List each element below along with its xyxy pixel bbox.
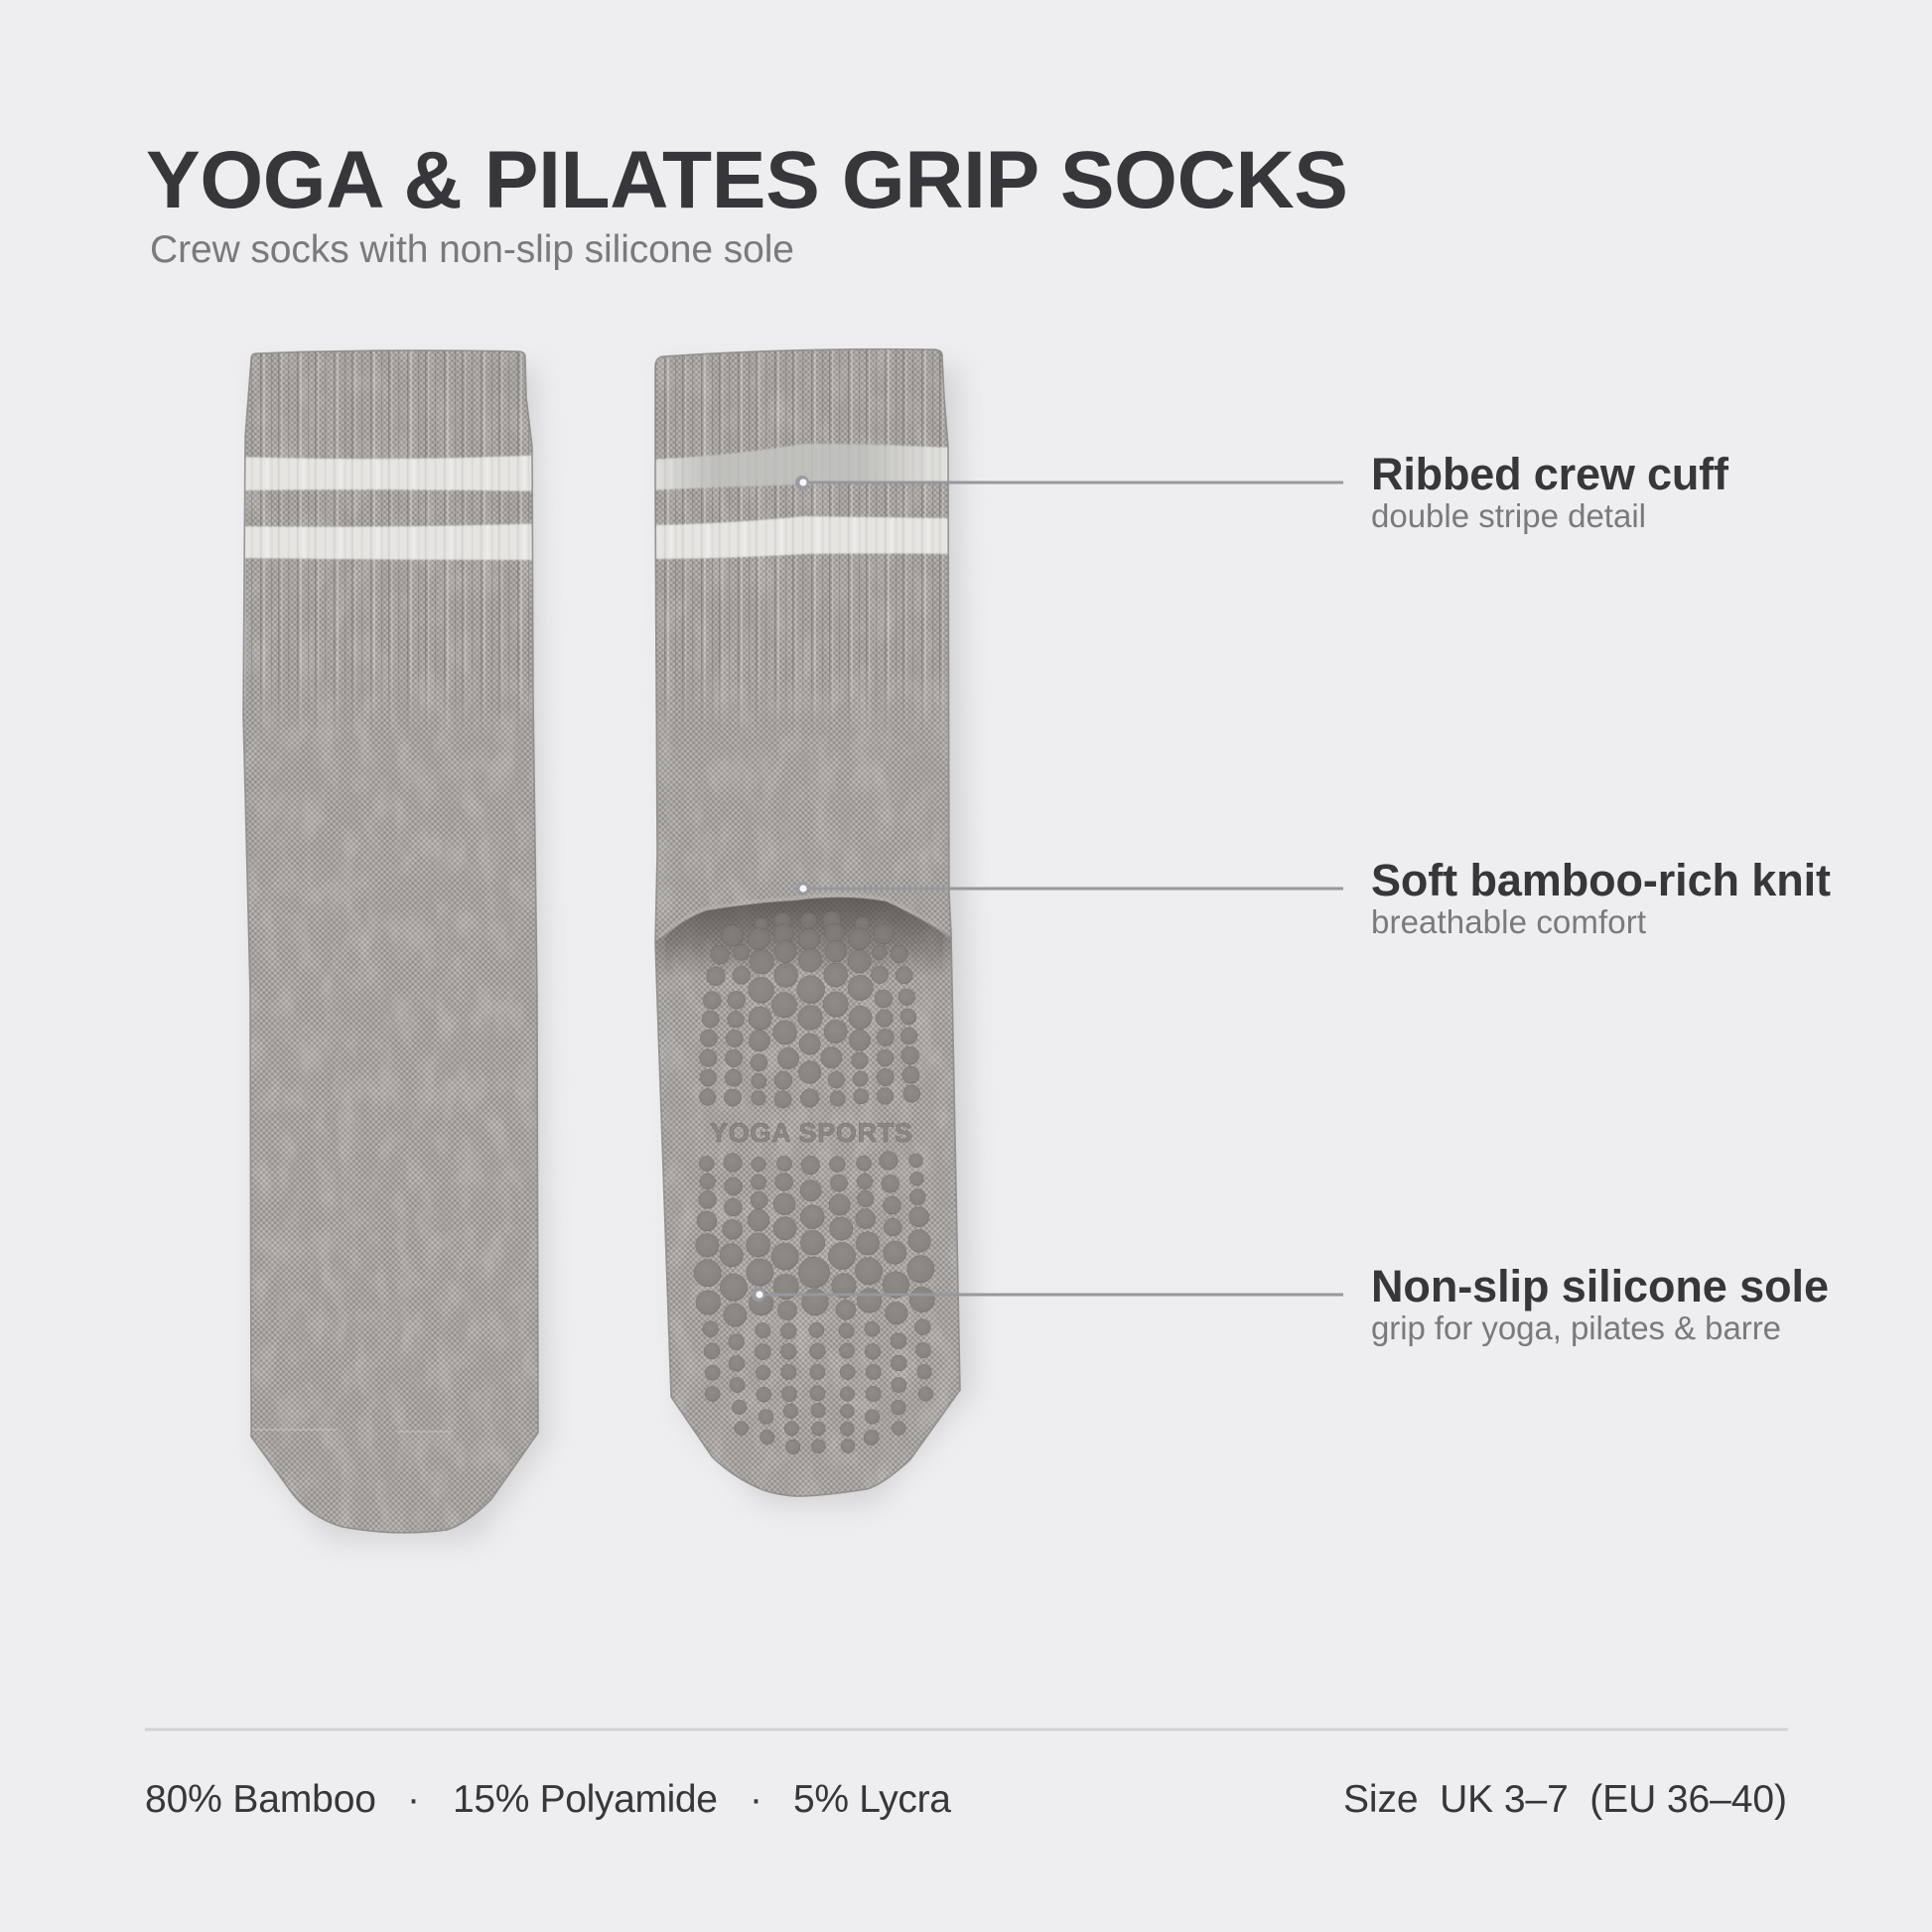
callout: ribbed crew cuff	[795, 449, 1729, 534]
callout: soft bamboo-rich knit	[795, 855, 1831, 940]
heel shade over grip dots	[665, 897, 943, 978]
footer: materials: ·	[750, 1778, 762, 1821]
label	[1371, 449, 1729, 534]
label: double stripe detail	[1371, 497, 1646, 534]
label: Non-slip silicone sole	[1371, 1261, 1829, 1311]
sock shadow	[260, 367, 548, 1539]
cuff stripes	[645, 444, 953, 559]
label	[1371, 1261, 1829, 1346]
leader line	[802, 481, 1343, 484]
callout: non-slip silicone sole	[752, 1261, 1829, 1346]
sock body	[238, 343, 546, 1544]
left sock: front view	[238, 343, 548, 1544]
marker dot	[752, 1288, 765, 1302]
sock shadow	[667, 367, 973, 1504]
footer: materials: 15% Polyamide	[453, 1778, 718, 1821]
label: Soft bamboo-rich knit	[1371, 855, 1831, 905]
leader line	[802, 888, 1343, 890]
label	[1371, 855, 1831, 940]
label: Ribbed crew cuff	[1371, 449, 1729, 499]
footer: materials: 80% Bamboo	[145, 1778, 376, 1821]
footer: materials: 5% Lycra	[793, 1778, 951, 1821]
footer: size: Size UK 3–7 (EU 36–40)	[1343, 1778, 1787, 1821]
title: YOGA & PILATES GRIP SOCKS	[146, 135, 1348, 225]
footer: materials	[145, 1778, 951, 1821]
silicone grip dots: forefoot and toe	[694, 1189, 934, 1454]
silicone grip dots: heel	[699, 911, 923, 1201]
cuff stripes	[238, 455, 546, 560]
heel fold	[655, 897, 951, 969]
marker dot	[795, 476, 809, 489]
sock body	[645, 343, 973, 1509]
footer rule	[145, 1727, 1788, 1731]
label: grip for yoga, pilates & barre	[1371, 1310, 1781, 1346]
sole lettering: YOGA SPORTS	[710, 1118, 912, 1148]
subtitle: Crew socks with non-slip silicone sole	[150, 228, 794, 271]
right sock: sole view	[645, 343, 973, 1509]
leader line	[759, 1293, 1343, 1297]
marker dot	[795, 882, 809, 896]
footer: materials: ·	[407, 1778, 420, 1821]
label: breathable comfort	[1371, 903, 1646, 940]
